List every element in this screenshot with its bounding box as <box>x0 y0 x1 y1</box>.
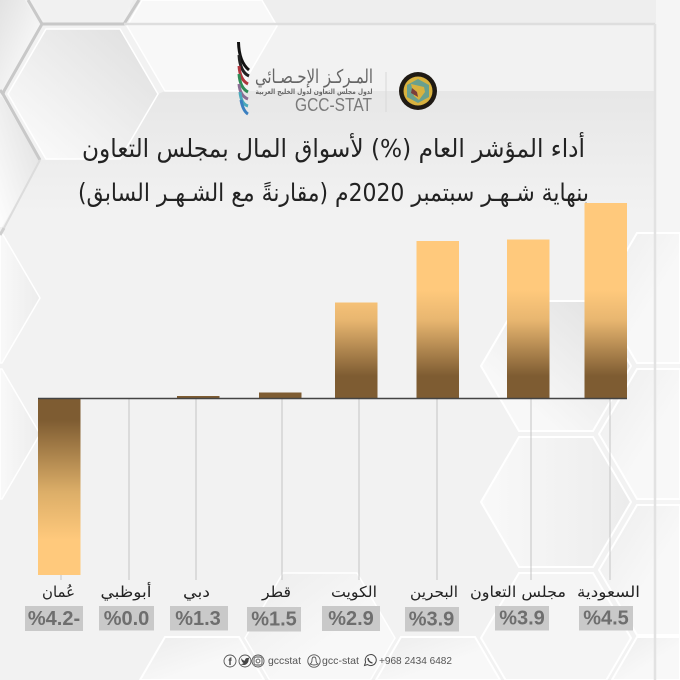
bar chart <box>38 203 627 575</box>
value boxes: %1.3 <box>175 608 221 630</box>
value boxes: %3.9 <box>409 608 454 630</box>
logo: GCC-STAT ribbon <box>238 42 249 114</box>
leader lines <box>61 399 610 580</box>
category labels: الكويت <box>331 583 377 601</box>
value boxes: %4.2- <box>28 608 80 630</box>
category labels: مجلس التعاون <box>470 583 566 601</box>
logo: statistical centre wordmark: المـركـز الإحـصـائي <box>255 66 373 88</box>
icon: twitter <box>239 655 251 667</box>
bar: Dubai <box>177 396 220 398</box>
icon: snapchat <box>308 655 320 667</box>
category labels: دبي <box>183 583 210 602</box>
logo: statistical centre wordmark <box>255 66 373 115</box>
value boxes: %4.5 <box>583 608 629 630</box>
bar: Bahrain <box>416 241 459 399</box>
category labels: السعودية <box>577 583 640 601</box>
category labels: قطر <box>261 583 291 601</box>
bar: Oman <box>38 398 80 575</box>
icon: facebook: f <box>228 657 232 668</box>
category labels: أبوظبي <box>100 582 152 602</box>
footer: social contacts <box>224 655 452 668</box>
logo: statistical centre wordmark: GCC-STAT <box>295 94 372 115</box>
category labels <box>42 582 640 602</box>
value boxes: %0.0 <box>104 608 149 630</box>
logo: statistical centre wordmark: لدول مجلس التعاون لدول الخليج العربية <box>256 88 373 96</box>
title: أداء المؤشر العام (%) لأسواق المال بمجلس التعاون <box>82 131 585 164</box>
bar: GCC <box>507 240 550 399</box>
icon: facebook <box>224 655 236 668</box>
chart baseline <box>38 398 627 400</box>
bar: Saudi Arabia <box>584 203 627 399</box>
icon: instagram <box>252 655 264 667</box>
bar: Kuwait <box>335 302 378 399</box>
value boxes <box>25 606 633 632</box>
title <box>78 131 589 207</box>
handle: gccstat: gccstat <box>268 655 301 667</box>
title: بنهاية شـهـر سبتمبر 2020م (مقارنةً مع الشـهـر السابق) <box>78 178 589 207</box>
category labels: البحرين <box>410 583 458 601</box>
value boxes: %3.9 <box>499 608 545 630</box>
handle: gcc-stat: gcc-stat <box>322 655 359 667</box>
category labels: عُمان <box>42 583 75 601</box>
value boxes: %1.5 <box>251 608 297 630</box>
icon: whatsapp <box>364 655 376 666</box>
value boxes: %2.9 <box>328 608 374 630</box>
phone number: +968 2434 6482 <box>379 655 452 667</box>
bar: Qatar <box>259 392 302 399</box>
icon: GCC emblem <box>399 72 437 110</box>
